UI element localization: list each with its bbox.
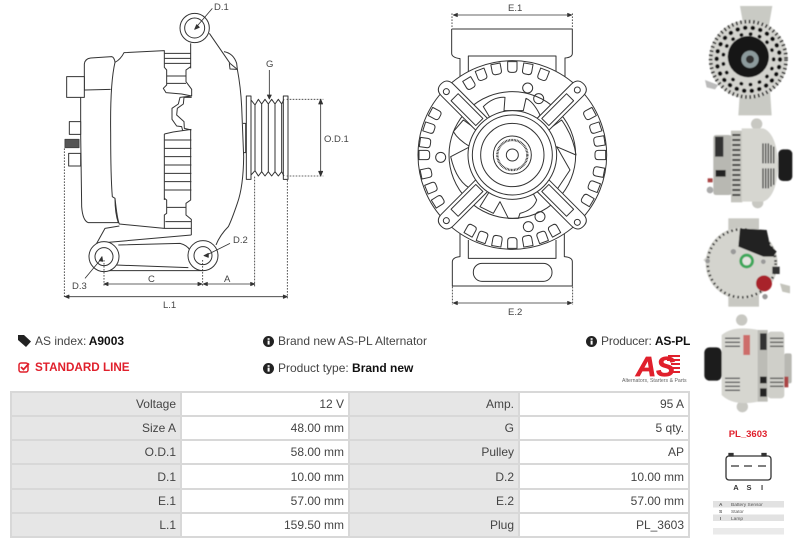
connector diagram: I — [761, 483, 763, 492]
specification table: E.1 — [158, 494, 176, 508]
specification table — [10, 391, 690, 538]
side view technical drawing: C — [148, 274, 155, 285]
specification table: 57.00 mm — [631, 494, 684, 508]
specification table: O.D.1 — [145, 445, 176, 459]
specification table: Pulley — [481, 445, 514, 459]
connector diagram: S — [746, 483, 752, 492]
side view technical drawing: A — [224, 274, 231, 285]
connector diagram: A — [733, 483, 739, 492]
front view technical drawing: E.1 — [508, 3, 522, 14]
specification table: 57.00 mm — [291, 494, 344, 508]
info: AS index: AS index: A9003 — [35, 334, 124, 348]
specification table: G — [505, 421, 514, 435]
side view technical drawing: O.D.1 — [324, 134, 349, 145]
specification table: 48.00 mm — [291, 421, 344, 435]
specification table: Amp. — [486, 397, 514, 411]
connector legend: Stator — [731, 509, 744, 515]
specification table: Plug — [490, 518, 514, 532]
side view technical drawing: D.3 — [72, 281, 87, 292]
info: producer: Producer: AS-PL — [601, 334, 690, 348]
specification table: 159.50 mm — [284, 518, 344, 532]
front view technical drawing: E.2 — [508, 307, 522, 318]
specification table: Size A — [142, 421, 176, 435]
specification table: 12 V — [319, 397, 344, 411]
connector legend: Lamp — [731, 516, 743, 522]
connector legend: I — [720, 516, 722, 522]
side view technical drawing: L.1 — [163, 300, 176, 311]
info: brand new alternator: Brand new AS-PL Alternator — [278, 334, 427, 348]
specification table: 58.00 mm — [291, 445, 344, 459]
specification table: E.2 — [496, 494, 514, 508]
info: product type: Product type: Brand new — [278, 360, 413, 374]
specification table: D.1 — [157, 470, 176, 484]
connector legend: A — [719, 502, 723, 508]
specification table: PL_3603 — [636, 518, 684, 532]
specification table: L.1 — [159, 518, 176, 532]
logo: AS-PL: Alternators, Starters & Parts — [622, 378, 687, 384]
side view technical drawing: D.2 — [233, 235, 248, 246]
specification table: 5 qty. — [656, 421, 684, 435]
specification table: Voltage — [136, 397, 176, 411]
connector legend: Battery Sensor — [731, 502, 763, 508]
info: standard line: STANDARD LINE — [35, 360, 130, 374]
side view technical drawing: G — [266, 59, 273, 70]
connector legend: S — [719, 509, 723, 515]
specification table: AP — [668, 445, 684, 459]
logo: AS-PL: AS — [635, 351, 675, 382]
connector label: PL_3603 — [729, 429, 767, 440]
specification table: 10.00 mm — [631, 470, 684, 484]
specification table: D.2 — [495, 470, 514, 484]
specification table: 95 A — [660, 397, 684, 411]
specification table: 10.00 mm — [291, 470, 344, 484]
side view technical drawing: D.1 — [214, 2, 229, 13]
